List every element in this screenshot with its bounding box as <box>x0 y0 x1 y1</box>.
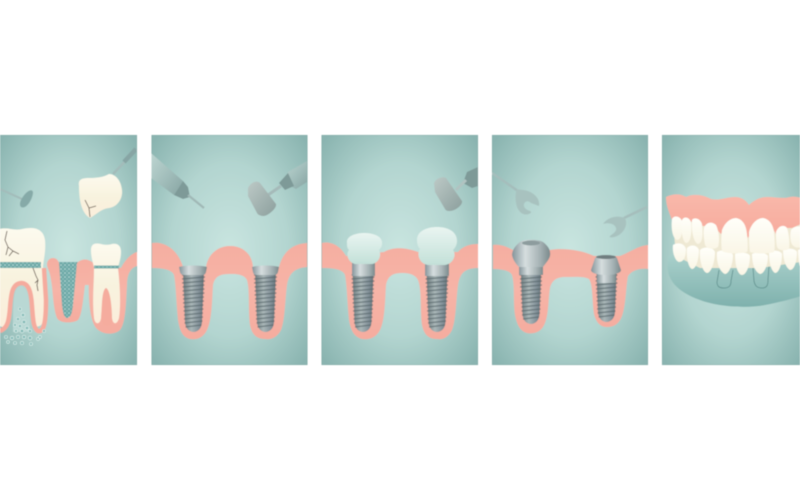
tooth backing <box>673 222 800 268</box>
implant right with short abutment <box>591 255 621 322</box>
socket with bone graft <box>57 262 78 318</box>
panel 3: healing caps on implants <box>322 135 478 365</box>
left broken tooth <box>0 228 46 332</box>
lower denture base <box>667 255 800 307</box>
upper teeth <box>672 217 800 254</box>
icon: polishing tool <box>434 167 478 211</box>
panel 2: implant placement <box>151 135 308 365</box>
panel 5: finished implant-supported denture <box>662 135 800 365</box>
implant left <box>179 266 207 332</box>
icon: polishing tool <box>248 161 307 216</box>
gum with two sleeves <box>152 243 307 339</box>
implant right with healing cap <box>417 227 457 332</box>
infographic: five dental implant stages <box>0 134 800 366</box>
icon: wrench left <box>492 173 539 215</box>
right tooth <box>91 244 121 326</box>
panel 4: abutments and wrenches <box>492 135 648 365</box>
panel 1: damaged teeth and bone loss <box>0 135 137 365</box>
teal band at gum line <box>0 262 41 268</box>
upper gum <box>666 194 800 238</box>
implant right <box>252 266 279 332</box>
icon: dental mirror <box>6 190 34 208</box>
bone granules <box>4 308 46 346</box>
implant left with tall abutment <box>512 240 550 324</box>
crown cracks <box>5 231 38 291</box>
gum with two sleeves <box>322 243 478 339</box>
implant left with healing cap <box>347 233 382 332</box>
icon: drill handpiece <box>151 153 204 208</box>
pink gum arch between roots <box>0 268 46 331</box>
gum with two sleeves <box>493 245 648 333</box>
implant outlines <box>717 266 769 288</box>
gum around socket <box>47 258 92 322</box>
icon: wrench right <box>603 207 647 237</box>
icon: probe holding extracted tooth <box>79 149 136 218</box>
gum around right tooth <box>89 252 137 334</box>
lower teeth <box>673 243 800 275</box>
gap between roots <box>13 286 30 332</box>
